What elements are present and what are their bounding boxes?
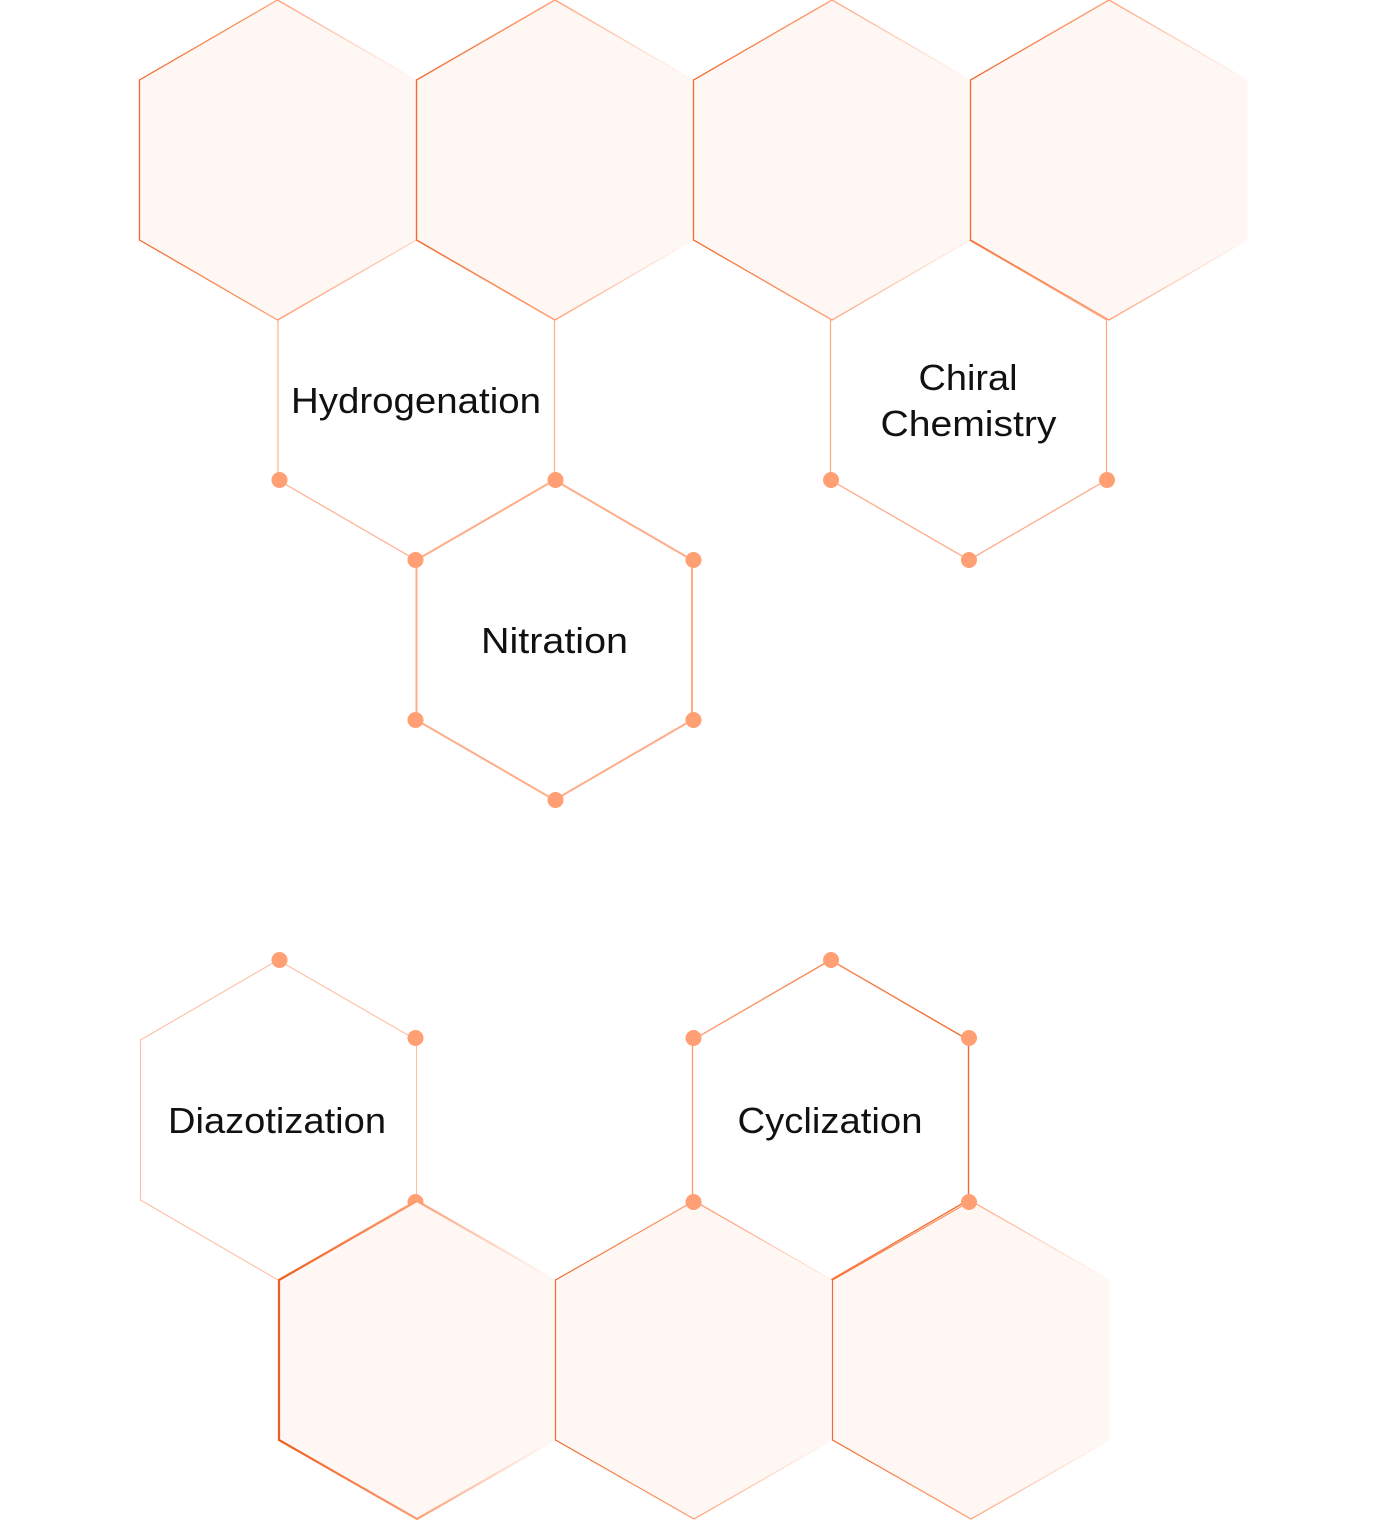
hexagon outline: Cyclization (692, 960, 968, 1280)
connector dots: lower group (272, 952, 977, 1210)
connector dots: upper group (272, 472, 1115, 808)
filled hexagon: top row 4 (970, 0, 1248, 320)
label: Hydrogenation: Hydrogenation (291, 380, 541, 421)
label: Chiral Chemistry (880, 357, 1056, 444)
filled hexagon: top row 1 (140, 0, 416, 320)
dot: Diazotization lower right (408, 1194, 424, 1210)
label: Chiral Chemistry: Chiral (918, 357, 1018, 398)
hexagon outline: Hydrogenation (278, 240, 554, 560)
filled hexagon: top row 3 (694, 0, 970, 320)
filled hexagon: bottom row 1 (279, 1201, 555, 1519)
hexagon outline: Nitration (416, 480, 692, 800)
label: Cyclization: Cyclization (738, 1100, 922, 1141)
label: Nitration: Nitration (481, 620, 628, 661)
filled hexagon: top row 2 (416, 0, 693, 320)
filled hexagon: bottom row 3 (832, 1201, 1110, 1519)
hexagon outline: Chiral Chemistry (830, 240, 1106, 560)
filled hexagon: bottom row 2 (556, 1201, 832, 1519)
hexagon outline: Diazotization (140, 960, 416, 1280)
label: Chiral Chemistry: Chemistry (880, 403, 1056, 444)
label: Diazotization: Diazotization (168, 1100, 386, 1141)
